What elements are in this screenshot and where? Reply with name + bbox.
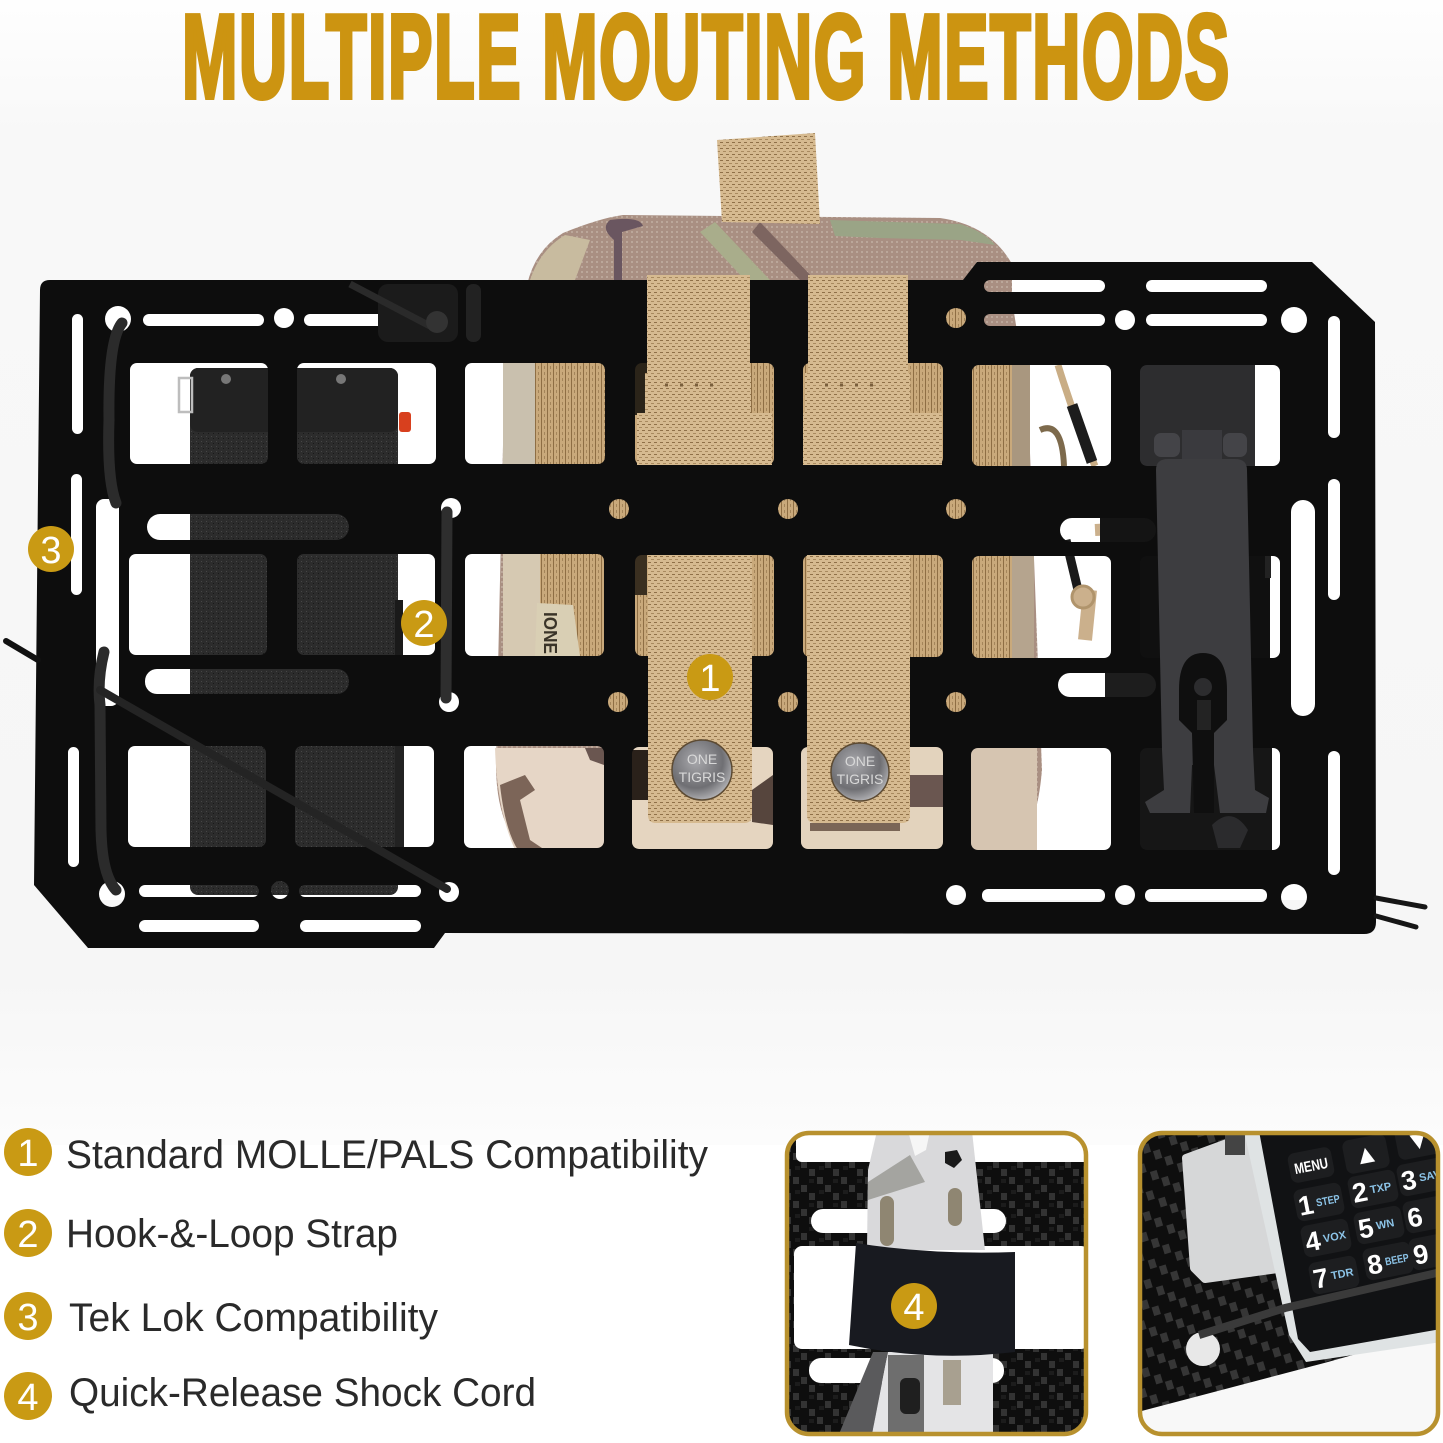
keypad: 2 bbox=[1350, 1176, 1370, 1209]
keypad: WN bbox=[1375, 1217, 1395, 1232]
product photo: pouch, radio and plate bbox=[6, 133, 1425, 948]
radio bbox=[1244, 1131, 1441, 1362]
keypad: TDR bbox=[1330, 1266, 1355, 1282]
lower strap right with snap: ONE bbox=[845, 753, 875, 769]
keypad: 9 bbox=[1411, 1238, 1431, 1271]
lower strap left with snap: ONE bbox=[687, 751, 717, 767]
badge 3 bbox=[28, 526, 74, 572]
tek lok backing bbox=[1100, 365, 1272, 850]
keypad: VOX bbox=[1322, 1229, 1348, 1245]
keypad: MENU bbox=[1293, 1155, 1330, 1178]
keypad: 5 bbox=[1356, 1212, 1376, 1245]
lower strap right with snap: TIGRIS bbox=[837, 771, 883, 787]
webbing seen through windows bbox=[535, 363, 1034, 658]
pouch label: IONE bbox=[540, 612, 560, 654]
velcro strap bbox=[849, 1243, 1015, 1356]
tek lok clip bbox=[1145, 430, 1269, 848]
legend item 3: 3 bbox=[17, 1297, 39, 1339]
keypad: 1 bbox=[1296, 1189, 1316, 1222]
keypad: ▲ bbox=[1351, 1137, 1381, 1171]
side cord and pull bbox=[1040, 365, 1135, 640]
keypad: TXP bbox=[1369, 1181, 1392, 1196]
keypad: 7 bbox=[1311, 1262, 1331, 1295]
legend item 1: 1 bbox=[17, 1133, 39, 1175]
keypad: 8 bbox=[1365, 1248, 1385, 1281]
keypad: 4 bbox=[1303, 1225, 1323, 1258]
badge 1: 1 bbox=[699, 658, 721, 700]
badge 2 bbox=[401, 600, 447, 646]
badge 4: 4 bbox=[903, 1287, 925, 1329]
panel: shock cord radio photo bbox=[1138, 1119, 1443, 1434]
legend item 4: 4 bbox=[17, 1377, 39, 1419]
lower strap left with snap: TIGRIS bbox=[679, 769, 725, 785]
legend item 2: Hook-&-Loop Strap bbox=[66, 1212, 398, 1256]
keypad bbox=[1288, 1135, 1436, 1294]
top straps bbox=[637, 275, 942, 465]
pliers bbox=[867, 1131, 985, 1250]
keypad: 6 bbox=[1405, 1201, 1425, 1234]
badge 2: 2 bbox=[413, 604, 435, 646]
keypad: 3 bbox=[1399, 1164, 1419, 1197]
radio body bbox=[179, 368, 411, 895]
badge 1 bbox=[687, 654, 733, 700]
legend item 1: Standard MOLLE/PALS Compatibility bbox=[66, 1133, 708, 1177]
cord lock bbox=[350, 284, 481, 342]
pouch with camo bbox=[495, 215, 1042, 855]
lower strap right with snap bbox=[807, 555, 910, 823]
lower strap left with snap bbox=[648, 555, 752, 823]
shock cord bbox=[1199, 1272, 1441, 1335]
panel: hook and loop strap photo bbox=[785, 1125, 1091, 1434]
keypad: STEP bbox=[1315, 1193, 1341, 1209]
keypad: BEEP bbox=[1384, 1252, 1410, 1268]
legend bbox=[4, 1128, 708, 1420]
keypad: ▼ bbox=[1403, 1123, 1433, 1157]
shock cord loops bbox=[6, 323, 1425, 927]
molle plate bbox=[34, 262, 1376, 948]
badge 3: 3 bbox=[40, 530, 62, 572]
pouch pull tab bbox=[717, 133, 820, 224]
legend item 3: Tek Lok Compatibility bbox=[69, 1296, 438, 1340]
legend item 2: 2 bbox=[17, 1214, 39, 1256]
pouch label bbox=[535, 603, 580, 656]
badge 4 bbox=[891, 1283, 937, 1329]
legend item 4: Quick-Release Shock Cord bbox=[69, 1371, 536, 1415]
